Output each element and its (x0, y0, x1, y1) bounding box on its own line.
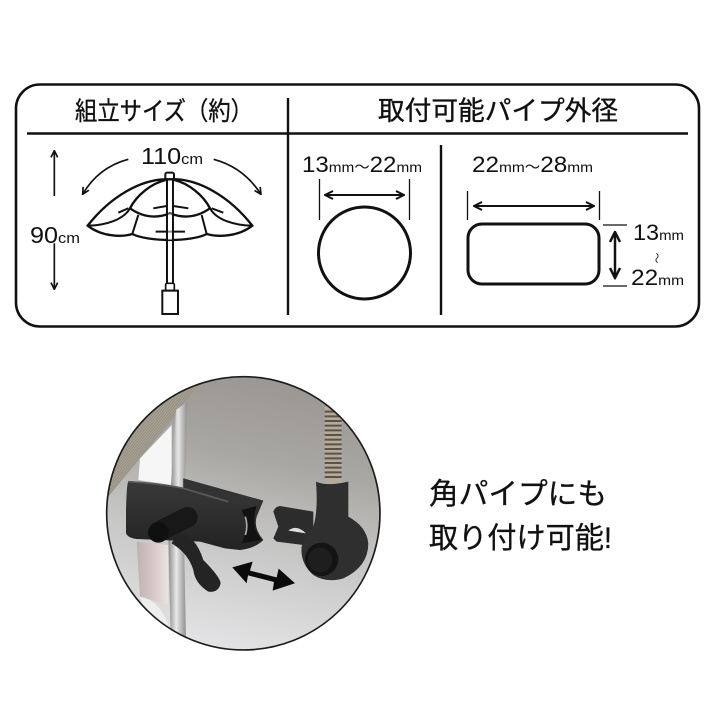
caption (429, 478, 612, 555)
label: square pipe width range: 22mm～28mm (472, 152, 593, 177)
clamp jaw (126, 478, 263, 550)
caption: 角パイプにも (429, 478, 607, 511)
arrow: height 90cm (52, 151, 57, 289)
heading: pipe diameter: 取付可能パイプ外径 (378, 96, 618, 126)
caption: 取り付け可能! (429, 522, 612, 555)
label: square pipe height range (631, 220, 684, 290)
threaded rod (325, 407, 342, 487)
label: square pipe height range: ～ (650, 252, 662, 264)
icon: round pipe (318, 179, 410, 299)
heading: assembled size: 組立サイズ（約） (75, 98, 253, 126)
label: square pipe height range: 22mm (631, 265, 684, 290)
lever (163, 517, 187, 529)
seat fabric (108, 386, 198, 496)
label: round pipe range: 13mm～22mm (302, 152, 422, 177)
socket insert (273, 506, 313, 547)
icon: square pipe (468, 191, 627, 286)
icon: umbrella with dimensions (54, 151, 261, 314)
panel: size specification (16, 84, 699, 326)
mount body (301, 482, 368, 580)
arrow: width 110cm (83, 159, 261, 194)
circle outline (107, 377, 380, 650)
frame pipes (171, 402, 187, 490)
umbrella canopy (88, 179, 252, 240)
label: square pipe height range: 13mm (633, 220, 684, 245)
label: 90cm: 90cm (30, 222, 80, 248)
photo: clamp in circle (100, 370, 380, 650)
arrow: double-headed connect (232, 562, 295, 591)
label: 110cm: 110cm (141, 143, 203, 169)
